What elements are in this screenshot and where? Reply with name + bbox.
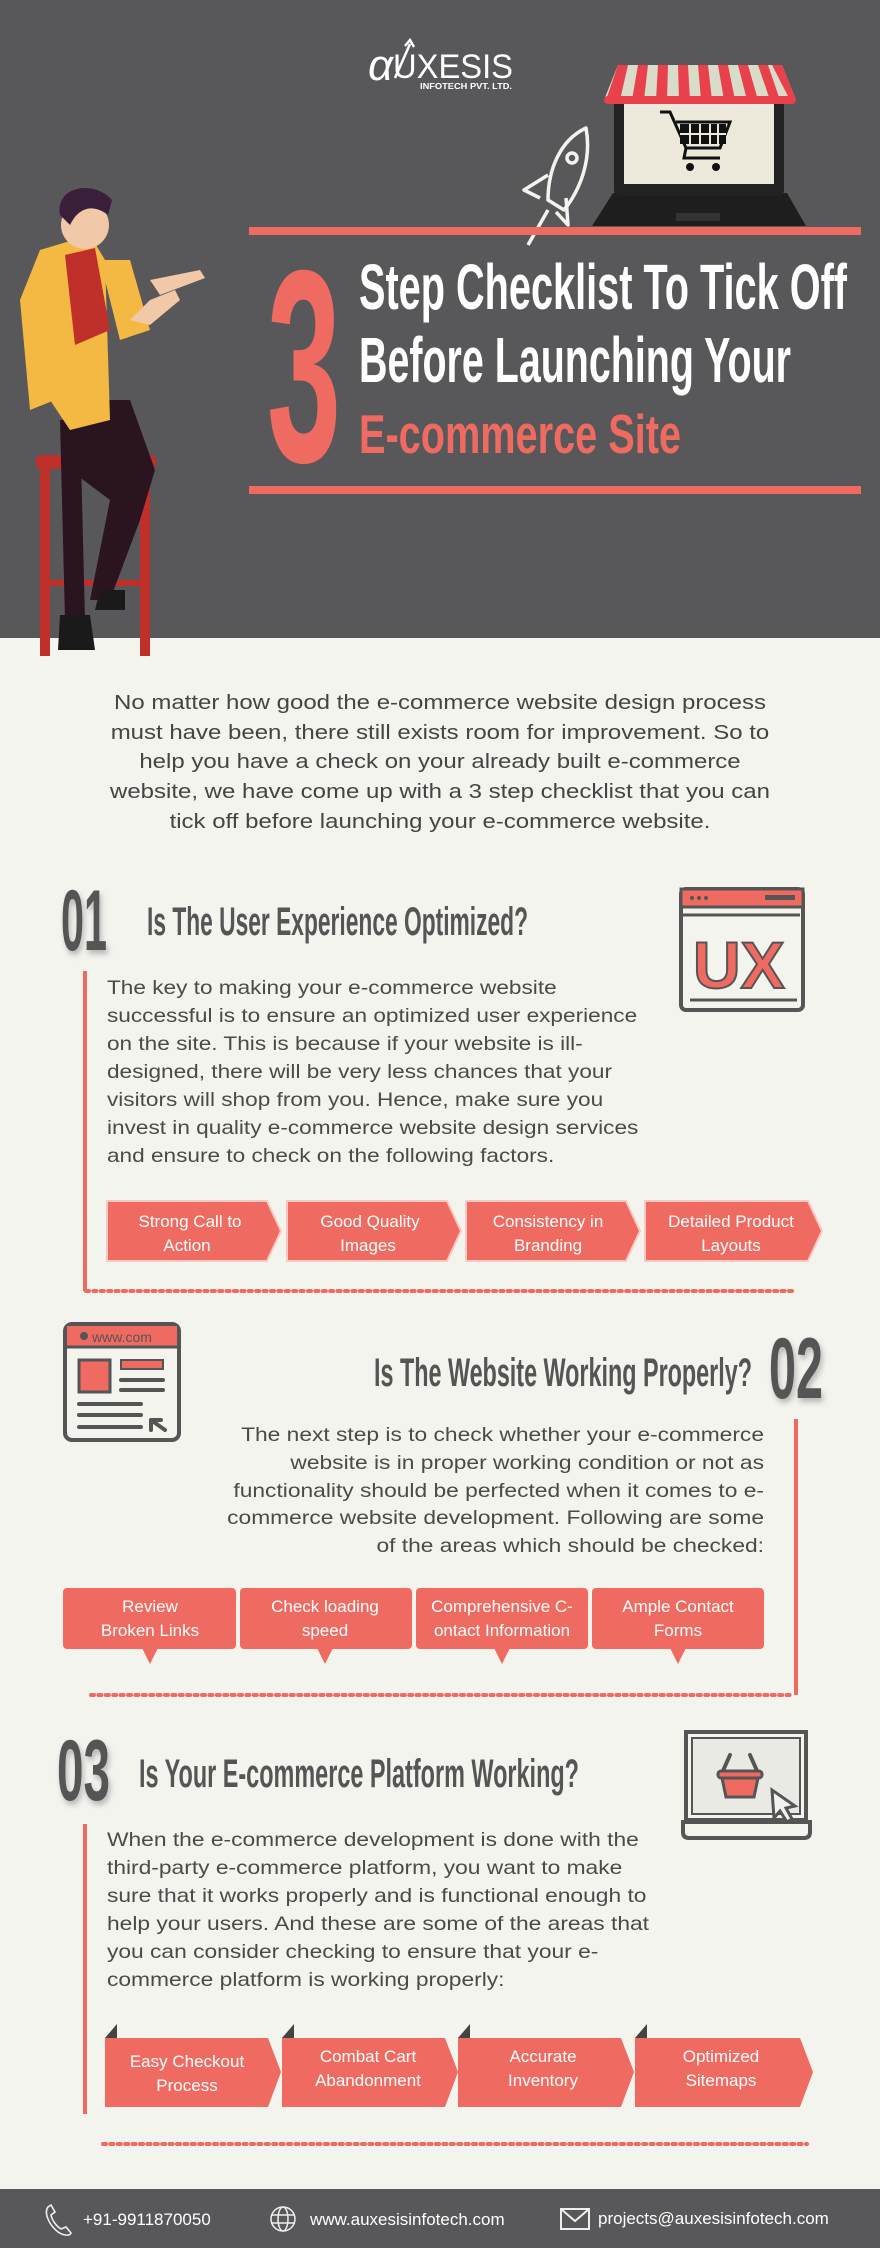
number 02: 02: [769, 1321, 823, 1417]
paragraph 2: commerce website development. Following are some: [227, 1508, 764, 1529]
paragraph 2: The next step is to check whether your e-commerce: [241, 1425, 764, 1446]
chevrons row 3: Easy Checkout: [130, 2052, 244, 2071]
chevrons row 1: Consistency in: [493, 1212, 603, 1231]
logo: α: [368, 41, 395, 90]
paragraph 3: you can consider checking to ensure that your e-: [107, 1942, 598, 1963]
icon: laptop with basket: [683, 1732, 810, 1838]
section 3: [57, 1723, 813, 2144]
title: E-commerce Site: [359, 403, 681, 465]
chevrons row 1: Images: [340, 1236, 396, 1255]
icon: rocket: [524, 128, 588, 245]
paragraph 3: help your users. And these are some of the areas that: [107, 1914, 649, 1935]
paragraph 2: functionality should be perfected when it comes to e-: [233, 1481, 764, 1502]
vertical accent line: [83, 1824, 87, 2114]
chevrons row 1: Good Quality: [320, 1212, 420, 1231]
vertical accent line: [794, 1419, 798, 1695]
paragraph 1: visitors will shop from you. Hence, make sure you: [107, 1090, 603, 1111]
footer: projects@auxesisinfotech.com: [598, 2209, 829, 2228]
paragraph 1: successful is to ensure an optimized user experience: [107, 1006, 637, 1027]
paragraph 1: on the site. This is because if your website is ill-: [107, 1034, 583, 1055]
chevrons row 3: Abandonment: [315, 2071, 421, 2090]
dotted line: [103, 2142, 807, 2146]
paragraph 3: commerce platform is working properly:: [107, 1970, 505, 1991]
chevrons row 3: [105, 2024, 813, 2107]
chevrons row 3: Inventory: [508, 2071, 578, 2090]
callouts row 2: Ample Contact: [622, 1597, 734, 1616]
chevrons row 1: [107, 1201, 822, 1261]
logo: [368, 40, 513, 91]
title: [267, 214, 847, 520]
icon: website window: [65, 1324, 179, 1440]
callouts row 2: Comprehensive C-: [431, 1597, 573, 1616]
paragraph 3: third-party e-commerce platform, you want to make: [107, 1858, 622, 1879]
icon: UX window: [681, 889, 803, 1010]
vertical accent line: [83, 971, 87, 1291]
callouts row 2: Check loading: [271, 1597, 379, 1616]
chevrons row 1: Branding: [514, 1236, 582, 1255]
heading 3: Is Your E-commerce Platform Working?: [139, 1752, 579, 1796]
chevrons row 3: Accurate: [509, 2047, 577, 2066]
icon: online store laptop: [592, 65, 806, 226]
title: 3: [267, 214, 341, 520]
intro text: tick off before launching your e-commerce website.: [170, 810, 710, 833]
intro text: help you have a check on your already built e-commerce: [139, 750, 741, 773]
callouts row 2: Broken Links: [101, 1621, 199, 1640]
section 2: [63, 1321, 823, 1695]
chevrons row 3: Sitemaps: [686, 2071, 756, 2090]
icon: phone: [46, 2205, 71, 2235]
paragraph 1: invest in quality e-commerce website design services: [107, 1118, 638, 1139]
section 1: [61, 873, 822, 1291]
section 1: 01: [61, 873, 107, 969]
intro text: website, we have come up with a 3 step checklist that you can: [109, 780, 770, 803]
icon: website window: www.com: [91, 1329, 152, 1345]
chevrons row 3: Process: [156, 2076, 218, 2095]
chevrons row 3: Combat Cart: [320, 2047, 416, 2066]
chevrons row 1: Detailed Product: [668, 1212, 794, 1231]
chevrons row 3: Optimized: [683, 2047, 759, 2066]
logo: UXESIS: [393, 48, 513, 86]
number 03: 03: [57, 1723, 110, 1819]
callouts row 2: Review: [122, 1597, 179, 1616]
callouts row 2: [63, 1588, 764, 1664]
footer: +91-9911870050: [83, 2210, 211, 2229]
intro text: No matter how good the e-commerce website design process: [114, 691, 766, 714]
dotted line: [91, 1693, 794, 1697]
paragraph 2: of the areas which should be checked:: [376, 1536, 764, 1557]
icon: globe: [271, 2207, 295, 2231]
chevrons row 1: Action: [163, 1236, 211, 1255]
heading 1: Is The User Experience Optimized?: [147, 900, 528, 944]
callouts row 2: ontact Information: [434, 1621, 570, 1640]
chevrons row 1: Layouts: [701, 1236, 761, 1255]
icon: mail: [561, 2209, 589, 2229]
paragraph 2: [227, 1425, 764, 1557]
footer: www.auxesisinfotech.com: [309, 2210, 505, 2229]
paragraph 1: [107, 978, 638, 1167]
chevrons row 1: Strong Call to: [138, 1212, 242, 1231]
callouts row 2: Forms: [654, 1621, 702, 1640]
illustration: man on stool: [20, 188, 205, 656]
logo: INFOTECH PVT. LTD.: [420, 82, 512, 91]
dotted line: [86, 1289, 796, 1293]
paragraph 1: and ensure to check on the following factors.: [107, 1146, 554, 1167]
intro text: [109, 691, 770, 833]
paragraph 2: website is in proper working condition or not as: [289, 1453, 764, 1474]
paragraph 1: The key to making your e-commerce website: [107, 978, 557, 999]
paragraph 1: designed, there will be very less chances that your: [107, 1062, 612, 1083]
footer: [0, 2189, 880, 2248]
callouts row 2: speed: [302, 1621, 348, 1640]
paragraph 3: sure that it works properly and is functional enough to: [107, 1886, 646, 1907]
bottom divider line: [249, 486, 861, 494]
paragraph 3: When the e-commerce development is done with the: [107, 1830, 639, 1851]
top divider line: [249, 227, 861, 235]
intro text: must have been, there still exists room for improvement. So to: [111, 721, 769, 744]
paragraph 3: [107, 1830, 649, 1991]
icon: UX window: UX: [693, 928, 785, 1002]
header background: [0, 0, 880, 638]
